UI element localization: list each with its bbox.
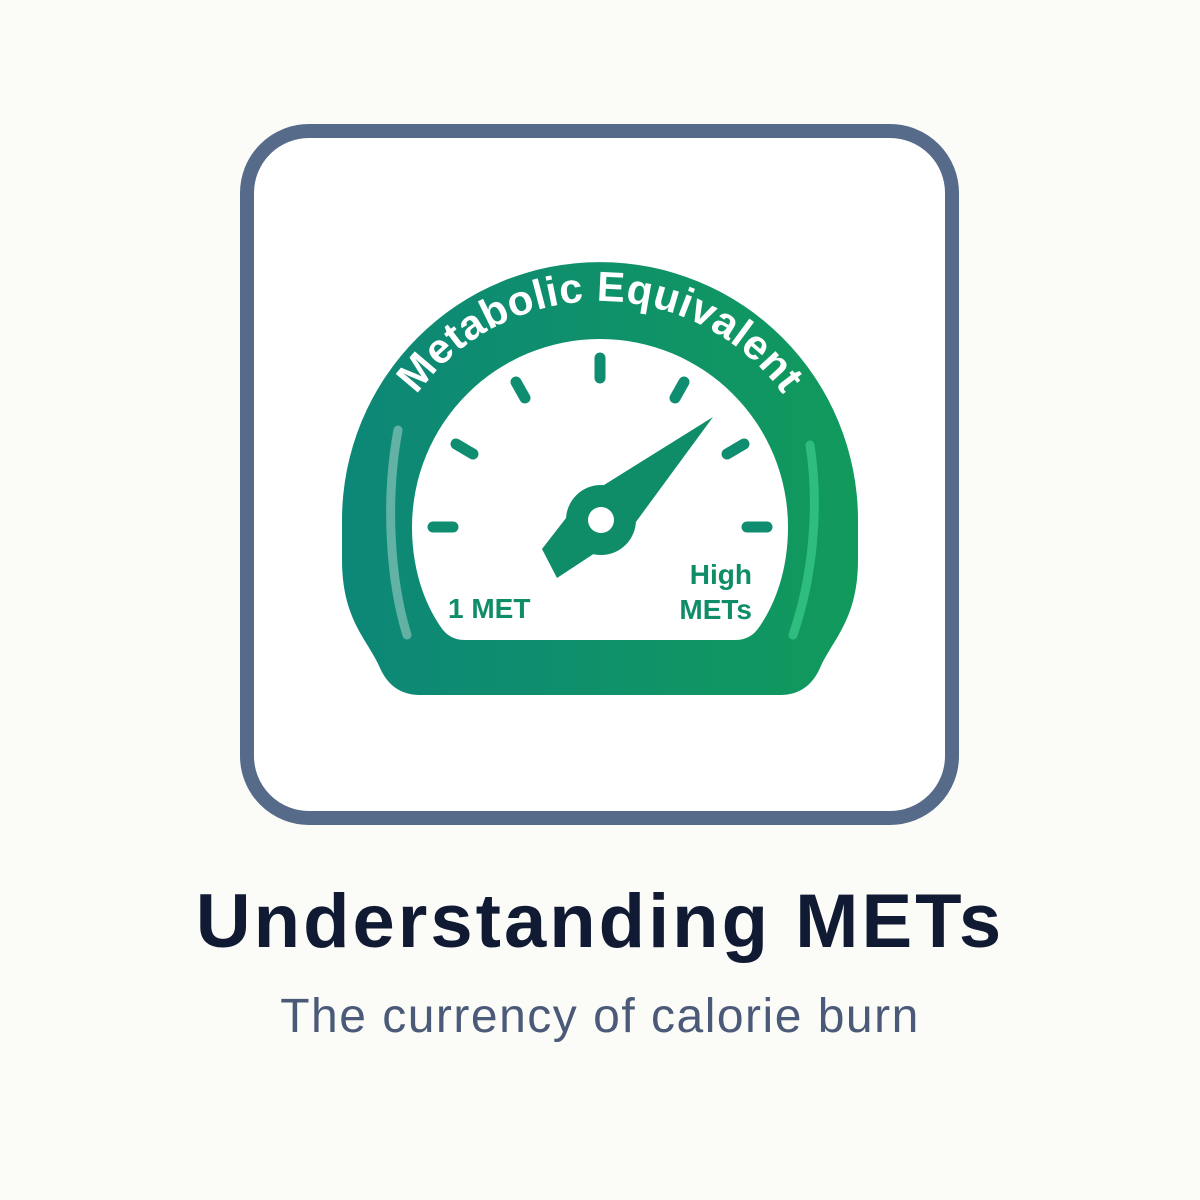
- gauge: [342, 262, 858, 695]
- highlight strips: [391, 430, 407, 635]
- gauge body: [342, 262, 858, 695]
- subtitle: The currency of calorie burn: [280, 990, 920, 1043]
- frame: [247, 131, 952, 818]
- scale labels: [448, 559, 752, 625]
- dial face: [412, 339, 788, 640]
- title: Understanding METs: [196, 879, 1004, 964]
- ticks: [433, 358, 767, 527]
- needle: [542, 417, 713, 578]
- scale labels: High: [690, 559, 752, 590]
- icon card: gauge: [240, 124, 959, 825]
- scale labels: 1 MET: [448, 593, 530, 624]
- arc label: Metabolic Equivalent: [396, 272, 802, 394]
- scale labels: METs: [679, 594, 752, 625]
